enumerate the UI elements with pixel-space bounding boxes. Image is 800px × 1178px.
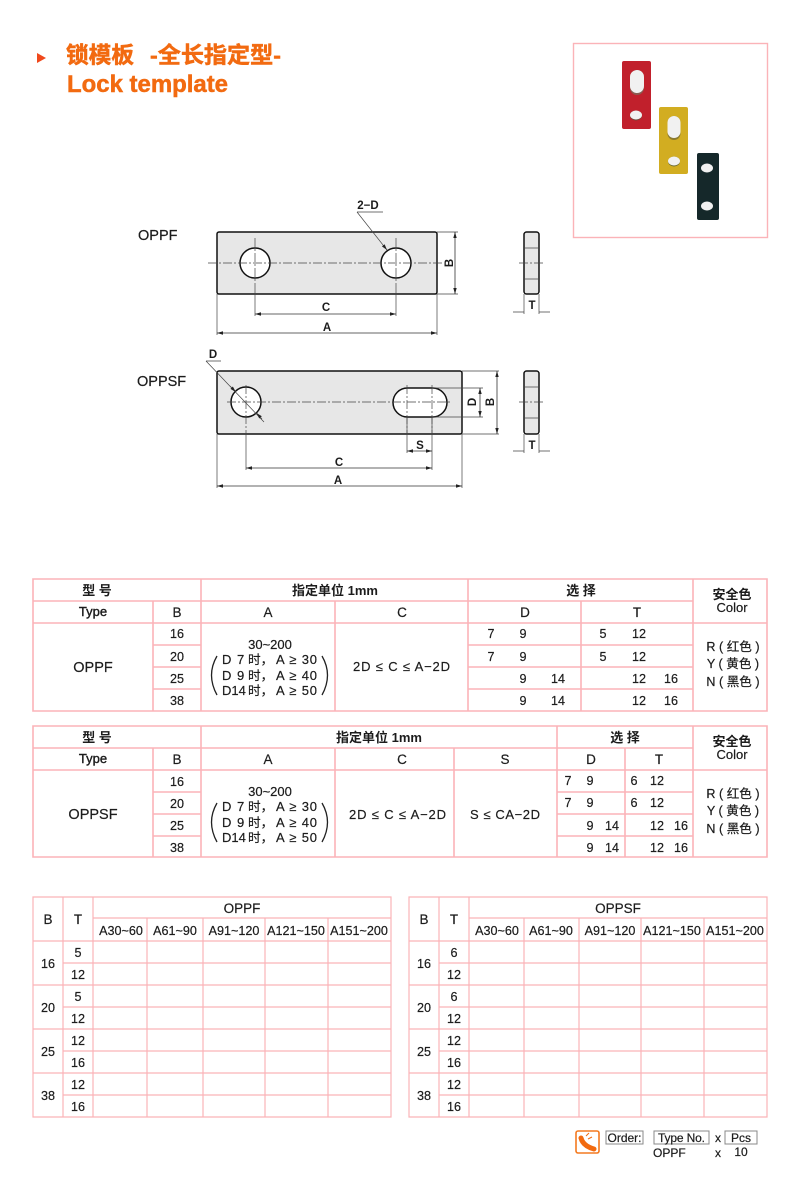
color options: R ( 红色 ) — [706, 639, 760, 654]
pieces box — [725, 1131, 757, 1145]
T values: 16 — [71, 1100, 85, 1114]
selection values: 6 — [630, 796, 638, 810]
selection values: 12 — [632, 694, 646, 708]
table headers: A — [263, 605, 273, 620]
table headers: 型 号 — [82, 583, 112, 598]
column A rules: A ≥ 40 — [276, 815, 317, 830]
color options: R ( 红色 ) — [706, 786, 760, 801]
selection values: 16 — [674, 819, 688, 833]
grid headers: A151~200 — [706, 924, 764, 938]
title — [37, 43, 281, 98]
diagram: OPPF front view — [208, 200, 458, 335]
selection values: 9 — [519, 694, 527, 708]
selection values: 7 — [487, 650, 495, 664]
dimension label T: T — [528, 300, 536, 312]
red lock plate — [622, 61, 651, 129]
table: OPPSF price grid — [409, 897, 767, 1117]
selection values: 5 — [599, 627, 607, 641]
table headers: 选 择 — [566, 583, 596, 598]
table headers: C — [397, 752, 407, 767]
column B values — [170, 775, 184, 855]
T values: 12 — [71, 1034, 85, 1048]
grid headers: A30~60 — [99, 924, 143, 938]
icon: title marker — [37, 53, 46, 63]
column B values: 20 — [170, 797, 184, 811]
grid headers: B — [43, 912, 53, 927]
column B values: 25 — [170, 819, 184, 833]
selection values: 12 — [632, 672, 646, 686]
grid headers — [43, 901, 388, 938]
B values — [417, 957, 431, 1103]
column S rule: S ≤ CA−2D — [470, 807, 540, 822]
table headers: T — [633, 605, 641, 620]
selection values: 16 — [664, 694, 678, 708]
grid headers: A121~150 — [267, 924, 325, 938]
color options — [706, 639, 760, 689]
heading: Chinese title: 锁模板 — [66, 43, 134, 68]
table headers — [79, 730, 752, 767]
selection values: 9 — [586, 841, 594, 855]
color options: Y ( 黄色 ) — [707, 803, 759, 818]
selection values: 14 — [551, 672, 565, 686]
table headers: Color — [716, 747, 748, 762]
grid headers: A61~90 — [153, 924, 197, 938]
table headers — [79, 583, 752, 620]
column A rules: D14 — [222, 830, 246, 845]
column B values — [170, 627, 184, 708]
B values: 38 — [41, 1089, 55, 1103]
B values — [41, 957, 55, 1103]
grid headers: A91~120 — [585, 924, 635, 938]
selection values: 14 — [605, 841, 619, 855]
B values: 38 — [417, 1089, 431, 1103]
table headers: D — [586, 752, 596, 767]
color options: Y ( 黄色 ) — [707, 656, 759, 671]
diagram: OPPF side view — [513, 232, 550, 314]
T values: 6 — [450, 990, 458, 1004]
column A rules: 9 — [237, 668, 244, 683]
selection values: 16 — [664, 672, 678, 686]
column A rules: 9 — [237, 815, 244, 830]
T values: 12 — [447, 1034, 461, 1048]
label: OPPF: OPPF — [138, 228, 178, 244]
table: OPPF specification — [33, 579, 767, 711]
column B values: 20 — [170, 650, 184, 664]
T values: 16 — [447, 1100, 461, 1114]
order example: OPPF — [653, 1146, 686, 1160]
T values: 16 — [71, 1056, 85, 1070]
grid headers: A30~60 — [475, 924, 519, 938]
table headers: Type — [79, 604, 107, 619]
type number box: Type No. — [658, 1131, 705, 1145]
table headers: S — [500, 752, 510, 767]
table headers: 安全色 — [712, 734, 752, 749]
panel: product photo — [574, 44, 768, 238]
column A rules: 30~200 — [248, 637, 292, 652]
column B values: 16 — [170, 627, 184, 641]
T values — [71, 946, 85, 1114]
order example: x — [715, 1146, 721, 1160]
selection values — [564, 774, 688, 855]
column B values: 38 — [170, 841, 184, 855]
selection values — [487, 627, 678, 708]
table headers: Color — [716, 600, 748, 615]
T values: 12 — [71, 1012, 85, 1026]
column B values: 25 — [170, 672, 184, 686]
dimension label A: A — [323, 322, 331, 334]
B values: 25 — [417, 1045, 431, 1059]
selection values: 7 — [487, 627, 495, 641]
table headers: 型 号 — [82, 730, 112, 745]
grid headers: B — [419, 912, 429, 927]
B values: 20 — [41, 1001, 55, 1015]
black lock plate — [697, 153, 719, 220]
yellow lock plate — [659, 107, 688, 174]
icon: phone — [576, 1131, 599, 1153]
column A rules: 7 — [237, 799, 244, 814]
table headers: 指定单位 1mm — [336, 730, 422, 745]
column A rules: A ≥ 40 — [276, 668, 317, 683]
dimension label S: S — [416, 440, 424, 452]
column A rules: 时， — [248, 684, 273, 698]
dimension label A: A — [334, 475, 342, 487]
dimension label C: C — [322, 302, 330, 314]
dimension label D (slot): D — [467, 398, 479, 406]
table: OPPSF specification — [33, 726, 767, 857]
color options: N ( 黑色 ) — [706, 821, 760, 836]
T values — [447, 946, 461, 1114]
table headers: A — [263, 752, 273, 767]
T values: 5 — [74, 990, 82, 1004]
B values: 20 — [417, 1001, 431, 1015]
label: OPPSF: OPPSF — [137, 374, 186, 390]
grid headers: A61~90 — [529, 924, 573, 938]
color options — [706, 786, 760, 836]
table headers: T — [655, 752, 663, 767]
column A rules: D — [222, 652, 231, 667]
selection values: 7 — [564, 774, 572, 788]
grid headers: A121~150 — [643, 924, 701, 938]
column A rules: A ≥ 30 — [276, 652, 317, 667]
grid headers: OPPSF — [595, 901, 641, 916]
T values: 12 — [71, 968, 85, 982]
selection values: 9 — [519, 627, 527, 641]
selection values: 9 — [586, 819, 594, 833]
selection values: 9 — [519, 650, 527, 664]
table headers: D — [520, 605, 530, 620]
table headers: 安全色 — [712, 587, 752, 602]
type name: OPPSF — [68, 807, 118, 823]
selection values: 14 — [605, 819, 619, 833]
column A rules: D — [222, 815, 231, 830]
table headers: Type — [79, 751, 107, 766]
selection values: 12 — [632, 627, 646, 641]
selection values: 5 — [599, 650, 607, 664]
type name: OPPF — [73, 660, 113, 676]
selection values: 12 — [650, 819, 664, 833]
selection values: 12 — [650, 796, 664, 810]
column A rules: D — [222, 668, 231, 683]
order example — [653, 1145, 748, 1160]
B values: 16 — [417, 957, 431, 971]
selection values: 6 — [630, 774, 638, 788]
selection values: 12 — [632, 650, 646, 664]
column A rules: A ≥ 50 — [276, 830, 317, 845]
column B values: 16 — [170, 775, 184, 789]
T values: 16 — [447, 1056, 461, 1070]
grid headers: A151~200 — [330, 924, 388, 938]
B values: 16 — [41, 957, 55, 971]
selection values: 9 — [519, 672, 527, 686]
table: OPPF price grid — [33, 897, 391, 1117]
dimension label 2-D: 2−D — [357, 200, 379, 212]
selection values: 12 — [650, 841, 664, 855]
column A rules — [212, 637, 328, 698]
selection values: 9 — [586, 796, 594, 810]
column A rules: 时， — [248, 653, 273, 667]
T values: 6 — [450, 946, 458, 960]
selection values: 14 — [551, 694, 565, 708]
selection values: 12 — [650, 774, 664, 788]
heading: English title: Lock template — [67, 71, 228, 98]
T values: 12 — [71, 1078, 85, 1092]
column A rules: D14 — [222, 683, 246, 698]
table headers: C — [397, 605, 407, 620]
dimension label T: T — [528, 440, 536, 452]
T values: 12 — [447, 968, 461, 982]
heading: Chinese subtitle: -全长指定型- — [150, 43, 281, 68]
column A rules — [212, 784, 328, 845]
B values: 25 — [41, 1045, 55, 1059]
T values: 12 — [447, 1012, 461, 1026]
T values: 12 — [447, 1078, 461, 1092]
dimension label C: C — [335, 457, 343, 469]
column A rules: 时， — [248, 669, 273, 683]
column A rules: 7 — [237, 652, 244, 667]
pieces box: Pcs — [731, 1131, 751, 1145]
order example: 10 — [734, 1145, 748, 1159]
column A rules: A ≥ 50 — [276, 683, 317, 698]
grid headers: OPPF — [224, 901, 260, 916]
column C rule: 2D ≤ C ≤ A−2D — [349, 807, 446, 822]
dimension label D (hole): D — [209, 349, 217, 361]
diagram: OPPSF front view — [206, 349, 499, 488]
color options: N ( 黑色 ) — [706, 674, 760, 689]
table headers: B — [172, 752, 182, 767]
selection values: 16 — [674, 841, 688, 855]
diagram: OPPSF side view — [513, 371, 550, 453]
dimension label B: B — [444, 259, 456, 267]
grid headers — [419, 901, 764, 938]
table headers: 指定单位 1mm — [292, 583, 378, 598]
table headers: B — [172, 605, 182, 620]
column B values: 38 — [170, 694, 184, 708]
column A rules: 时， — [248, 831, 273, 845]
column A rules: A ≥ 30 — [276, 799, 317, 814]
grid headers: A91~120 — [209, 924, 259, 938]
table headers: 选 择 — [610, 730, 640, 745]
multiply sign: x — [715, 1131, 721, 1145]
grid headers: T — [450, 912, 458, 927]
column A rules: 时， — [248, 800, 273, 814]
dimension label B: B — [485, 398, 497, 406]
grid headers: T — [74, 912, 82, 927]
column A rules: 30~200 — [248, 784, 292, 799]
order section — [576, 1131, 757, 1160]
selection values: 9 — [586, 774, 594, 788]
column C rule: 2D ≤ C ≤ A−2D — [353, 659, 450, 674]
T values: 5 — [74, 946, 82, 960]
order label: Order: — [607, 1131, 642, 1145]
column A rules: D — [222, 799, 231, 814]
column A rules: 时， — [248, 816, 273, 830]
selection values: 7 — [564, 796, 572, 810]
